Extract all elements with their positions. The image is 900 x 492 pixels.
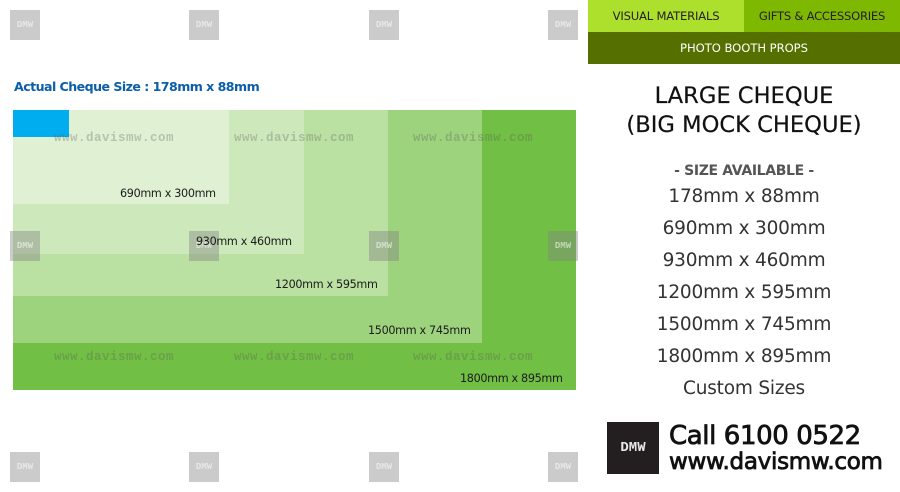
watermark: repeated DMW squares and URLs: www.davismw.com xyxy=(54,350,174,364)
watermark: repeated DMW squares and URLs: www.davismw.com xyxy=(234,350,354,364)
contact: phone number: Call 6100 0522 xyxy=(669,421,861,451)
title: large cheque xyxy=(626,83,862,138)
size list: 178mm x 88mm xyxy=(668,186,820,207)
watermark: repeated DMW squares and URLs: DMW xyxy=(17,20,33,30)
size block: 1200mm x 595mm xyxy=(13,110,388,296)
watermark: repeated DMW squares and URLs: DMW xyxy=(555,20,571,30)
nav tab: visual materials xyxy=(588,0,744,32)
contact: website: www.davismw.com xyxy=(669,449,883,475)
watermark: repeated DMW squares and URLs: www.davismw.com xyxy=(413,350,533,364)
size block: 1800mm x 895mm xyxy=(13,110,576,390)
icon: DMW logo xyxy=(607,422,659,474)
watermark: repeated DMW squares and URLs: DMW xyxy=(196,241,212,251)
subheading: size available: - SIZE AVAILABLE - xyxy=(674,163,814,179)
nav tab: gifts and accessories: GIFTS & ACCESSORIES xyxy=(759,9,885,23)
label: 930mm x 460mm: 930mm x 460mm xyxy=(196,235,292,248)
size list: 1500mm x 745mm xyxy=(657,314,831,335)
watermark: repeated DMW squares and URLs: DMW xyxy=(376,462,392,472)
nav tab: visual materials: VISUAL MATERIALS xyxy=(613,9,719,23)
size list: 690mm x 300mm xyxy=(663,218,825,239)
watermark: repeated DMW squares and URLs: www.davismw.com xyxy=(54,131,174,145)
title: large cheque: LARGE CHEQUE xyxy=(655,83,833,109)
watermark: repeated DMW squares and URLs: DMW xyxy=(555,462,571,472)
label: 690mm x 300mm: 690mm x 300mm xyxy=(120,187,216,200)
label: 1800mm x 895mm: 1800mm x 895mm xyxy=(460,372,563,385)
watermark: repeated DMW squares and URLs: DMW xyxy=(196,20,212,30)
watermark: repeated DMW squares and URLs: DMW xyxy=(376,241,392,251)
nav tab: photo booth props xyxy=(588,32,900,64)
nav tab: gifts and accessories xyxy=(744,0,900,32)
size block: 930mm x 460mm xyxy=(13,110,304,254)
watermark: repeated DMW squares and URLs: www.davismw.com xyxy=(234,131,354,145)
watermark: repeated DMW squares and URLs: DMW xyxy=(17,241,33,251)
title: large cheque: (BIG MOCK CHEQUE) xyxy=(626,112,862,138)
size block: 690mm x 300mm xyxy=(13,110,229,204)
size list: Custom Sizes xyxy=(683,378,805,399)
size list: 930mm x 460mm xyxy=(663,250,825,271)
heading: actual cheque size: Actual Cheque Size : 178mm x 88mm xyxy=(14,79,259,94)
size block: 1500mm x 745mm xyxy=(13,110,482,343)
size list: 1200mm x 595mm xyxy=(657,282,831,303)
size block: actual cheque 178mm x 88mm xyxy=(13,110,69,137)
watermark: repeated DMW squares and URLs: DMW xyxy=(555,241,571,251)
watermark: repeated DMW squares and URLs: DMW xyxy=(376,20,392,30)
label: 1500mm x 745mm: 1500mm x 745mm xyxy=(368,324,471,337)
watermark: repeated DMW squares and URLs: DMW xyxy=(17,462,33,472)
size list: 1800mm x 895mm xyxy=(657,346,831,367)
size list xyxy=(657,186,831,399)
watermark: repeated DMW squares and URLs: DMW xyxy=(196,462,212,472)
label: 1200mm x 595mm: 1200mm x 595mm xyxy=(275,278,378,291)
watermark: repeated DMW squares and URLs: www.davismw.com xyxy=(413,131,533,145)
size chart xyxy=(13,110,576,390)
icon: DMW logo: DMW xyxy=(620,440,646,456)
nav tab: photo booth props: PHOTO BOOTH PROPS xyxy=(680,41,808,55)
